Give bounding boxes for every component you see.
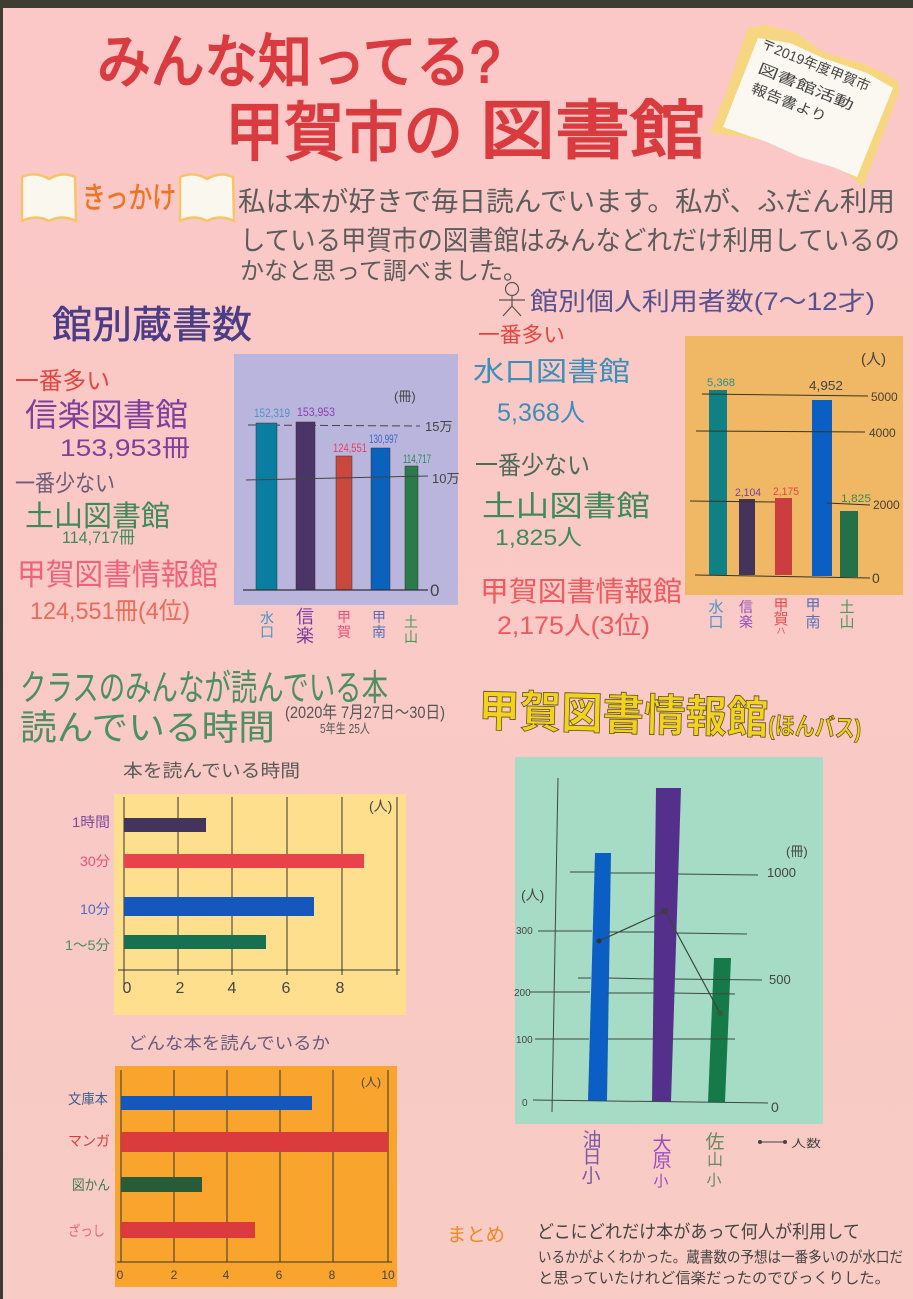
bar chart: collection by library: 0 (430, 581, 439, 600)
heading: class survey (20, 667, 445, 748)
axis labels: reading time: 30分 (80, 853, 110, 869)
bar chart: book types: 4 (223, 1268, 230, 1282)
text block: user facts: 一番多い (478, 324, 565, 347)
combo chart: 甲賀図書情報館: (人) (521, 887, 544, 903)
bar chart: users by library: 5000 (871, 390, 898, 404)
heading: class survey: (2020年 7月27日〜30日) (285, 703, 445, 722)
title: 図書館 (480, 95, 705, 167)
heading: users by library: 館別個人利用者数(7〜12才) (530, 288, 875, 316)
axis labels: school names: 原 (652, 1151, 672, 1172)
axis labels: book types: 文庫本 (68, 1091, 108, 1107)
axis labels: collection chart: 口 (260, 624, 274, 640)
icon: open book right (180, 174, 234, 221)
axis labels: collection chart: 山 (404, 629, 418, 645)
chart title: book types: どんな本を読んでいるか (128, 1034, 330, 1053)
bar chart: reading time: 6 (282, 980, 291, 997)
axis labels: reading time: 10分 (80, 901, 110, 917)
text block: summary: どこにどれだけ本があって何人が利用して (537, 1222, 860, 1242)
bar chart: users by library: 2000 (873, 498, 900, 512)
bar chart: book types: 10 (381, 1268, 395, 1282)
text block: user facts: 甲賀図書情報館 (480, 576, 682, 607)
axis labels: book types: マンガ (68, 1133, 110, 1149)
axis labels: school names: 油 (582, 1129, 602, 1151)
bar chart: users by library: 2,104 (735, 487, 761, 499)
axis labels: collection chart: 賀 (337, 624, 351, 640)
text block: user facts: 1,825人 (495, 525, 582, 550)
combo chart: 甲賀図書情報館 (514, 757, 823, 1124)
text block: collection facts: 114,717冊 (62, 528, 135, 547)
bar chart: collection by library: 153,953 (297, 405, 335, 419)
title (97, 30, 705, 169)
combo chart: 甲賀図書情報館: 500 (769, 972, 791, 987)
bar chart: reading time: 0 (123, 980, 132, 997)
text block: user facts: 2,175人(3位) (497, 612, 650, 640)
bar: 油日小 (588, 853, 611, 1101)
text block: collection facts (15, 368, 218, 625)
bar chart: book types (115, 1066, 397, 1287)
text block: user facts (473, 324, 682, 640)
bar chart: book types: (人) (361, 1075, 381, 1089)
axis labels: users chart: 口 (708, 614, 724, 631)
axis labels: reading time: 1時間 (72, 814, 110, 830)
axis labels: users chart: 南 (805, 614, 821, 631)
heading: class survey: 5年生 25人 (320, 721, 370, 736)
axis labels: collection chart: 信 (296, 607, 314, 627)
bar: 大原小 (652, 788, 681, 1102)
text block: collection facts: 一番多い (15, 368, 110, 395)
heading: summary: まとめ (447, 1225, 505, 1246)
bar chart: users by library (685, 336, 903, 595)
axis labels: school names: 大 (652, 1133, 672, 1155)
axis labels: book types (68, 1091, 110, 1239)
bar chart: reading time: (人) (369, 798, 392, 814)
combo chart: 甲賀図書情報館: 300 (516, 926, 533, 937)
heading: collection by library: 館別蔵書数 (52, 305, 252, 347)
heading: 甲賀図書情報館 (ほんバス): 甲賀図書情報館 (478, 687, 769, 744)
text block: collection facts: 信楽図書館 (25, 397, 188, 433)
bar chart: collection by library: 130,997 (369, 432, 398, 446)
axis labels: collection chart: 甲 (372, 609, 386, 625)
bar chart: book types: 6 (276, 1268, 283, 1282)
axis labels: school names: 小 (653, 1173, 669, 1190)
icon: open book left (22, 174, 76, 221)
source note: open book: 〒2019年度甲賀市 (759, 36, 872, 94)
heading: class survey: クラスのみんなが読んでいる本 (20, 667, 388, 708)
axis labels: school names: 小 (706, 1172, 722, 1189)
axis labels: users chart: 水 (708, 599, 724, 616)
title: 甲賀市の (225, 97, 463, 169)
combo chart: 甲賀図書情報館: (冊) (786, 844, 808, 859)
combo chart: 甲賀図書情報館: 200 (514, 988, 531, 999)
axis labels: users chart: 楽 (739, 614, 753, 630)
axis labels: school names: 佐 (705, 1131, 725, 1153)
source note: open book: 図書館活動 (756, 60, 856, 113)
heading: 甲賀図書情報館 (ほんバス): (ほんバス) (768, 712, 862, 743)
axis labels: users chart: 信 (739, 599, 753, 615)
combo chart: 甲賀図書情報館: 0 (771, 1099, 779, 1115)
text block: user facts: 一番少ない (475, 452, 590, 480)
bar chart: collection by library: 15万 (425, 419, 452, 434)
bar chart: book types: 8 (329, 1268, 336, 1282)
text block: collection facts: 甲賀図書情報館 (17, 559, 218, 592)
combo chart: 甲賀図書情報館: 1000 (767, 865, 796, 880)
source note: open book: 報告書より (749, 80, 829, 125)
axis labels: users chart: 甲 (773, 597, 789, 614)
axis labels: users chart: 賀 (773, 611, 789, 628)
きっかけ label: きっかけ (82, 182, 176, 215)
intro text: 私は本が好きで毎日読んでいます。私が、ふだん利用 (238, 187, 895, 217)
text block: collection facts: 一番少ない (15, 470, 115, 496)
combo chart: 甲賀図書情報館: 100 (516, 1035, 533, 1046)
axis labels: collection chart: 土 (404, 614, 418, 630)
bar chart: collection by library: 124,551 (333, 441, 367, 455)
text block: collection facts: 153,953冊 (60, 435, 190, 462)
title: みんな知ってる? (97, 30, 500, 95)
bar chart: users by library: 4,952 (809, 378, 843, 393)
bar chart: reading time: 2 (176, 980, 185, 997)
combo chart: 甲賀図書情報館: 0 (522, 1098, 528, 1109)
axis labels: collection chart (260, 607, 418, 646)
chart title: reading time: 本を読んでいる時間 (123, 761, 300, 781)
bar chart: users by library: 1,825 (841, 493, 871, 505)
axis labels: users chart (708, 597, 855, 636)
axis labels: school names: 日 (582, 1147, 602, 1168)
bar chart: collection by library: 114,717 (403, 452, 431, 466)
source note: open book (710, 25, 900, 187)
axis labels: collection chart: 南 (372, 624, 386, 640)
bar chart: collection by library: 10万 (432, 471, 459, 486)
bar chart: users by library: 5,368 (707, 377, 735, 389)
bar: 佐山小 (708, 958, 731, 1102)
axis labels: users chart: 甲 (805, 597, 821, 614)
bar chart: collection by library: 152,319 (254, 406, 290, 420)
text block: user facts: 水口図書館 (473, 357, 630, 387)
legend: number of users: 人数 (791, 1137, 821, 1150)
axis labels: collection chart: 甲 (337, 609, 351, 625)
bar chart: users by library: 2,175 (773, 486, 799, 498)
text block: user facts: 5,368人 (497, 399, 585, 427)
axis labels: reading time (65, 814, 110, 953)
heading: class survey: 読んでいる時間 (20, 709, 275, 748)
axis labels: collection chart: 水 (260, 610, 274, 626)
intro text: かなと思って調べました。 (240, 258, 527, 285)
bar chart: reading time (114, 794, 406, 1015)
axis labels: book types: ざっし (68, 1223, 105, 1239)
text block: summary (537, 1222, 903, 1287)
bar chart: collection by library (234, 354, 459, 605)
text block: collection facts: 土山図書館 (25, 500, 170, 533)
text block: collection facts: 124,551冊(4位) (30, 598, 190, 625)
bar chart: book types: 0 (117, 1268, 124, 1282)
bar chart: users by library: 0 (872, 570, 880, 586)
axis labels: collection chart: 楽 (296, 626, 314, 646)
heading: きっかけ with book icons (22, 174, 234, 221)
axis labels: school names (581, 1129, 725, 1190)
legend: number of users (758, 1137, 821, 1150)
axis labels: book types: 図かん (72, 1177, 110, 1193)
axis labels: users chart: ハ (776, 626, 786, 636)
bar chart: reading time: 4 (228, 980, 237, 997)
axis labels: school names: 山 (707, 1151, 723, 1169)
text block: summary: と思っていたけれど信楽だったのでびっくりした。 (538, 1270, 890, 1287)
text block: user facts: 土山図書館 (482, 490, 650, 523)
line series: number of users (599, 911, 720, 1013)
bar chart: collection by library: (冊) (394, 389, 416, 404)
axis labels: reading time: 1〜5分 (65, 937, 110, 953)
bar chart: book types: 2 (171, 1268, 178, 1282)
bar chart: users by library: 4000 (869, 426, 896, 440)
axis labels: users chart: 土 (839, 599, 855, 616)
intro text (238, 187, 900, 285)
bar chart: users by library: (人) (861, 351, 886, 368)
axis labels: users chart: 山 (839, 614, 855, 631)
bar chart: reading time: 8 (336, 980, 345, 997)
icon: stick figure (499, 282, 525, 316)
axis labels: school names: 小 (581, 1165, 601, 1187)
